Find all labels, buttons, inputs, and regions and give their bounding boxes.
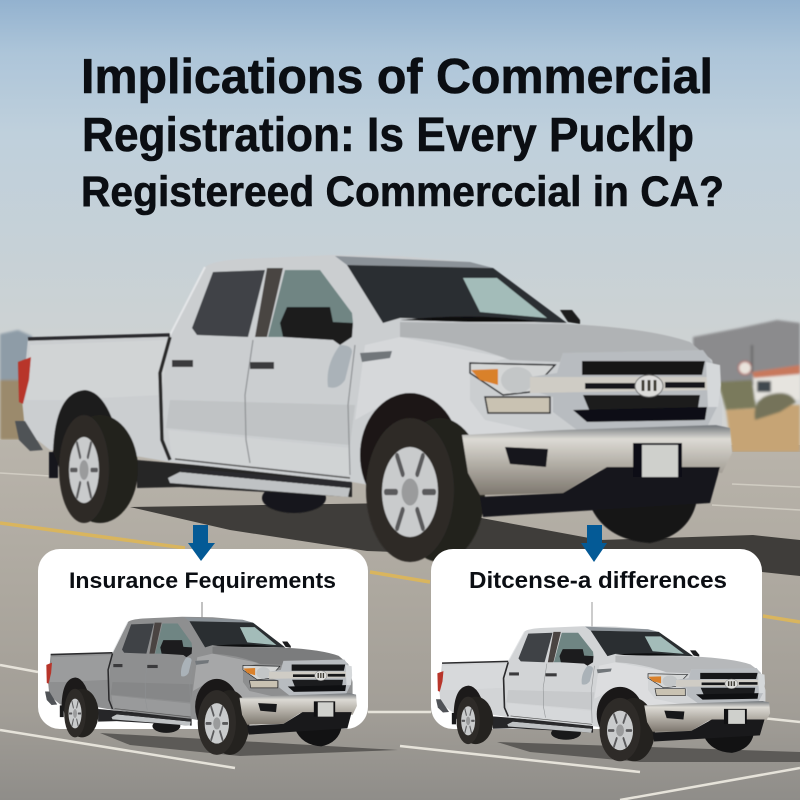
silver pickup truck bbox=[436, 602, 770, 761]
asphalt ground bbox=[0, 440, 800, 800]
main pickup truck bbox=[15, 255, 732, 562]
arrow: to insurance panel bbox=[188, 525, 215, 561]
title: Implications of Commercial bbox=[81, 50, 713, 104]
arrow: to licence panel bbox=[581, 525, 607, 562]
grey pickup truck bbox=[45, 602, 357, 755]
title: Registration: Is Every Pucklp bbox=[82, 109, 694, 162]
panel: licence differences bbox=[431, 549, 762, 729]
shadow under main truck bbox=[130, 503, 800, 576]
heading: licence: Ditcense-a differences bbox=[469, 567, 727, 593]
heading: insurance: Insurance Fequirements bbox=[69, 568, 336, 593]
title: Registereed Commerccial in CA? bbox=[81, 168, 724, 216]
background scenery: hills, bushes, building and rocks bbox=[0, 320, 800, 452]
shadow under grey truck bbox=[100, 733, 398, 756]
panel: insurance requirements bbox=[38, 549, 368, 729]
shadow under silver truck bbox=[497, 742, 800, 762]
road markings bbox=[0, 473, 800, 800]
title bbox=[81, 50, 724, 216]
sky background bbox=[0, 0, 800, 445]
